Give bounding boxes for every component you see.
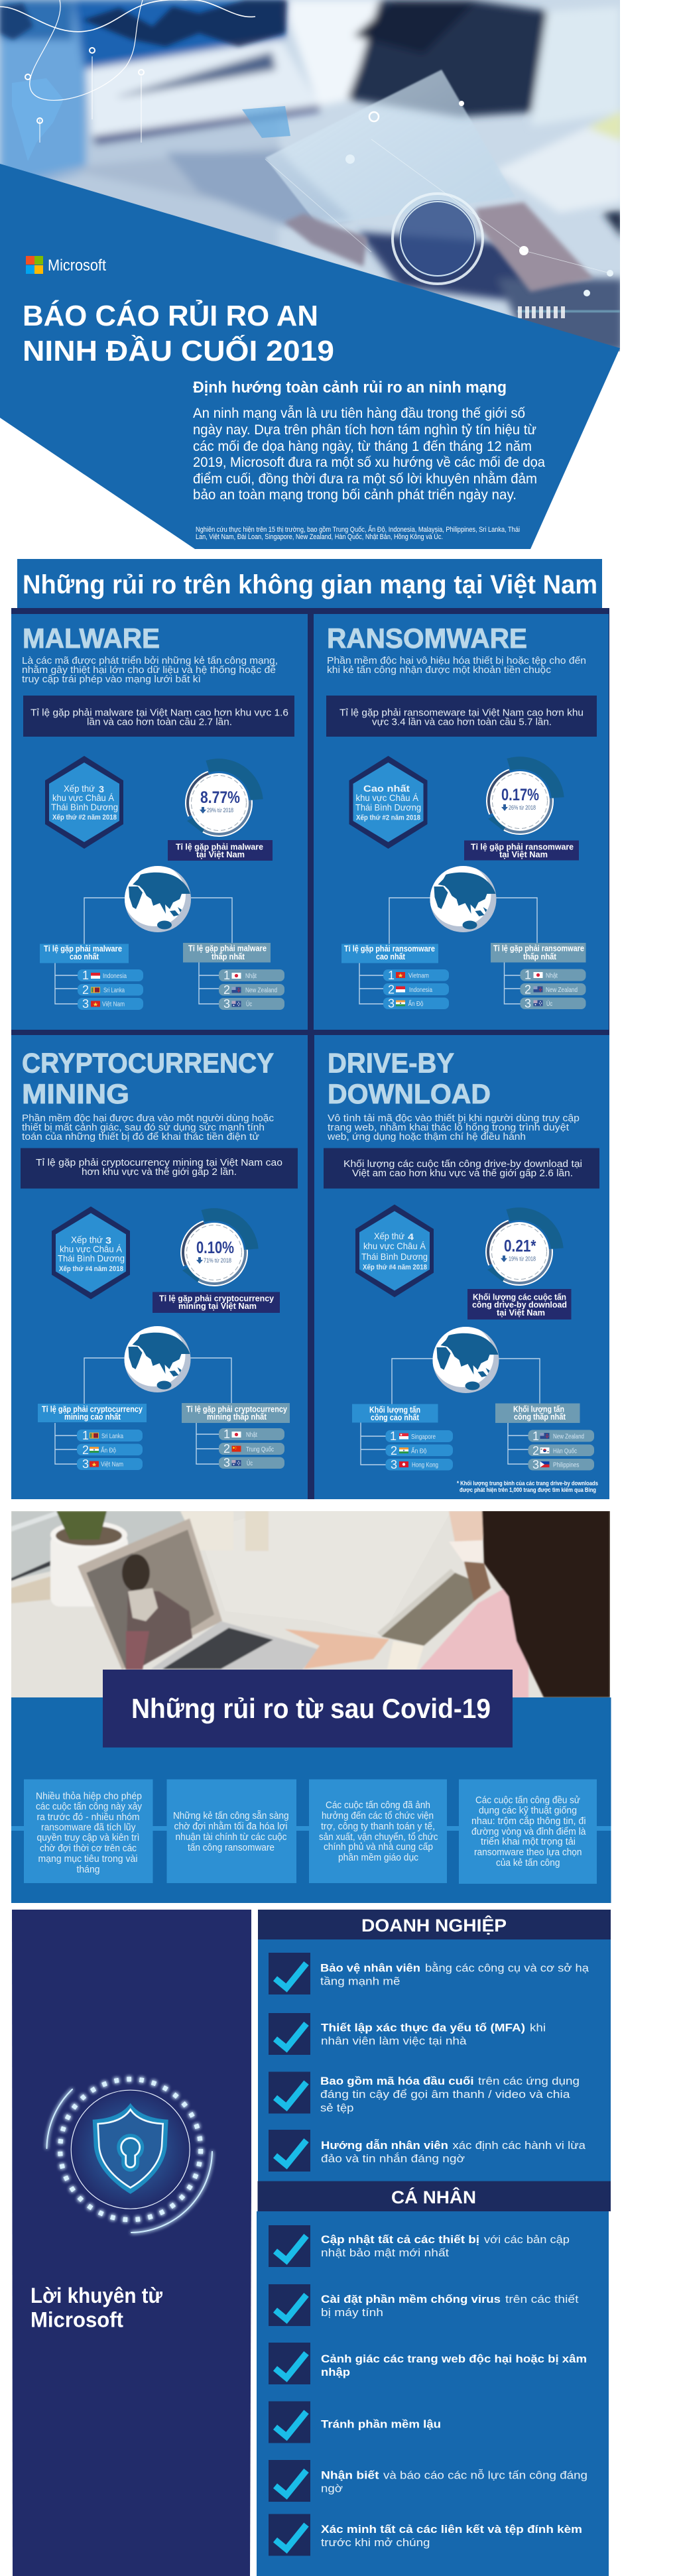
heading banner: cyber risks in Vietnam bbox=[17, 559, 602, 609]
ranking: lowest ransomware: Nhật bbox=[546, 972, 558, 980]
card 3 bbox=[309, 1780, 447, 1883]
card 1: Nhiều thỏa hiệp cho phép bbox=[36, 1790, 142, 1802]
hexagon: regional rank: Cao nhất bbox=[363, 783, 410, 794]
label: highest malware bbox=[40, 944, 129, 963]
ranking: highest cryptocurrency: 3 bbox=[82, 1457, 89, 1471]
card 4: Các cuộc tấn công đều sử bbox=[475, 1794, 580, 1806]
icon: Microsoft logo bbox=[26, 256, 106, 275]
label: highest attack volume: công cao nhất bbox=[371, 1413, 420, 1422]
donut: encounter rate: 8.77% bbox=[200, 788, 240, 807]
label: highest malware: Tỉ lệ gặp phải malware bbox=[44, 944, 122, 953]
research footnote: Nghiên cứu thực hiện trên 15 thị trường, bao gồm Trung Quốc, Ấn Độ, Indonesia, Malaysia, Philippines, Sri Lanka, Thái bbox=[196, 525, 520, 534]
ranking: highest ransomware bbox=[383, 969, 449, 1011]
card 4 bbox=[459, 1780, 597, 1884]
stat callout bbox=[23, 696, 294, 737]
heading: business: DOANH NGHIỆP bbox=[361, 1915, 507, 1935]
heading: individuals bbox=[257, 2181, 611, 2211]
stat callout: Tỉ lệ gặp phải cryptocurrency mining tại Việt Nam cao bbox=[36, 1157, 282, 1168]
ranking: highest malware bbox=[78, 969, 143, 1011]
stat callout: Khối lượng các cuộc tấn công drive-by download tại bbox=[343, 1158, 582, 1170]
malware description bbox=[22, 655, 278, 685]
item: guide employees bbox=[269, 2130, 586, 2172]
item: update devices bbox=[269, 2225, 570, 2267]
panel: advice from Microsoft bbox=[12, 1910, 251, 2576]
intro paragraph: ngày nay. Dựa trên phân tích hơn tám nghìn tỷ tín hiệu từ bbox=[193, 422, 536, 438]
hexagon: regional rank: khu vực Châu Á bbox=[52, 792, 115, 803]
card 1: tháng bbox=[77, 1864, 99, 1875]
ranking: highest malware: 2 bbox=[82, 983, 89, 997]
heading: individuals: CÁ NHÂN bbox=[391, 2187, 476, 2207]
ranking: lowest ransomware: 3 bbox=[525, 997, 531, 1011]
stat callout: Việt am cao hơn khu vực và thế giới gấp 2.6 lần. bbox=[352, 1168, 573, 1179]
ranking: highest malware: Việt Nam bbox=[102, 1000, 125, 1008]
ranking: highest attack volume: 1 bbox=[390, 1430, 397, 1443]
card 1 bbox=[24, 1780, 153, 1883]
intro paragraph: điểm cuối, đồng thời đưa ra một số lời khuyên nhằm đảm bbox=[193, 471, 537, 487]
caption: Tỉ lệ gặp phải malware bbox=[176, 842, 263, 851]
item: update devices: Cập nhật tất cả các thiết bị bbox=[321, 2234, 479, 2246]
item: malicious websites: Cảnh giác các trang web độc hại hoặc bị xâm bbox=[321, 2353, 587, 2365]
hero blue panel bbox=[0, 164, 620, 549]
ranking: lowest cryptocurrency: Trung Quốc bbox=[246, 1445, 274, 1453]
item: end-to-end encryption: Bao gồm mã hóa đầu cuối bbox=[320, 2075, 473, 2087]
cryptocurrency description: thiết bị mất cảnh giác, sau đó sử dụng sức mạnh tính bbox=[22, 1122, 265, 1133]
label: lowest cryptocurrency bbox=[182, 1403, 290, 1423]
ranking: lowest malware: Nhật bbox=[245, 972, 257, 980]
ranking: highest attack volume: 2 bbox=[391, 1444, 397, 1457]
stat callout: hơn khu vực và thế giới gấp 2 lần. bbox=[82, 1166, 237, 1178]
donut: encounter rate: 26% từ 2018 bbox=[509, 804, 536, 812]
ranking: highest ransomware: 2 bbox=[388, 983, 395, 996]
ranking: lowest cryptocurrency: Nhật bbox=[246, 1431, 257, 1439]
item: antivirus bbox=[269, 2284, 579, 2326]
label: lowest attack volume: Khối lượng tấn bbox=[513, 1404, 564, 1414]
footnote: được phát hiện trên 1,000 trang được tìm kiếm qua Bing bbox=[460, 1487, 596, 1494]
donut: attack volume bbox=[487, 1207, 564, 1283]
item: MFA: khi bbox=[530, 2022, 546, 2034]
connector lines bbox=[55, 1358, 231, 1464]
card 2: chờ đợi nhằm tối đa hóa lợi bbox=[174, 1821, 288, 1832]
label: highest attack volume: Khối lượng tấn bbox=[369, 1406, 420, 1415]
panel: personal checklist bbox=[257, 2181, 611, 2576]
card 4: của kẻ tấn công bbox=[496, 1857, 560, 1869]
hexagon: regional rank: khu vực Châu Á bbox=[363, 1241, 426, 1251]
item: guide employees: Hướng dẫn nhân viên bbox=[321, 2139, 448, 2152]
caption: mining tại Việt Nam bbox=[178, 1301, 257, 1311]
card 3: trợ, công ty thanh toán y tế, bbox=[321, 1821, 435, 1832]
heading box: Những rủi ro từ sau Covid-19 bbox=[131, 1693, 491, 1724]
item: MFA bbox=[269, 2013, 546, 2055]
panel: ransomware bbox=[314, 614, 609, 1030]
hexagon: regional rank: Thái Bình Dương bbox=[58, 1253, 125, 1264]
research footnote: Lan, Việt Nam, Đài Loan, Singapore, New Zealand, Hàn Quốc, Nhật Bản, Hồng Kông và Úc. bbox=[196, 532, 443, 541]
heading: advice: Lời khuyên từ bbox=[31, 2284, 163, 2307]
stat callout bbox=[326, 696, 597, 737]
donut: attack volume: 0.21* bbox=[504, 1237, 536, 1256]
card 3: chính phủ và nhà cung cấp bbox=[324, 1841, 433, 1853]
item: protect employees: tầng mạnh mẽ bbox=[320, 1976, 401, 1988]
ranking: lowest malware: New Zealand bbox=[245, 987, 277, 995]
label: lowest ransomware: Tỉ lệ gặp phải ransomware bbox=[493, 944, 584, 953]
item: verify links: Xác minh tất cả các liên kết và tệp đính kèm bbox=[321, 2524, 582, 2536]
heading: cryptocurrency mining: MINING bbox=[22, 1078, 129, 1109]
item: protect employees: Bảo vệ nhân viên bbox=[320, 1963, 420, 1975]
card 1: các cuộc tấn công này xảy bbox=[36, 1801, 142, 1812]
donut: encounter rate: 29% từ 2018 bbox=[207, 807, 233, 814]
ranking: lowest cryptocurrency: Úc bbox=[247, 1459, 253, 1467]
ranking: lowest malware bbox=[219, 969, 284, 1011]
stat callout: Tỉ lệ gặp phải malware tại Việt Nam cao hơn khu vực 1.6 bbox=[31, 707, 288, 719]
card 4: triển khai một trọng tải bbox=[481, 1836, 576, 1847]
hero photo: hands on holographic tablet with world map bbox=[0, 0, 623, 351]
heading: advice bbox=[31, 2284, 163, 2331]
item: malicious websites bbox=[269, 2343, 587, 2384]
ranking: lowest malware: Úc bbox=[246, 1000, 252, 1008]
ranking: highest cryptocurrency: Việt Nam bbox=[101, 1460, 123, 1468]
malware description: Là các mã được phát triển bởi những kẻ tấn công mạng, bbox=[22, 655, 278, 666]
hexagon: regional rank: 4 bbox=[408, 1231, 414, 1242]
item: antivirus: bị máy tính bbox=[321, 2307, 383, 2319]
caption: Tỉ lệ gặp phải cryptocurrency bbox=[159, 1293, 275, 1304]
hexagon: regional rank bbox=[349, 756, 427, 849]
covid photo: woman on video call with masked man on laptop bbox=[11, 1510, 610, 1699]
ranking: lowest cryptocurrency: 1 bbox=[223, 1428, 230, 1441]
ranking: highest attack volume: Hong Kong bbox=[412, 1461, 438, 1469]
connector lines bbox=[359, 898, 537, 1004]
item: recognize and report: ngờ bbox=[321, 2483, 343, 2494]
ransomware description bbox=[327, 655, 586, 676]
donut: attack volume: 19% từ 2018 bbox=[509, 1256, 536, 1262]
footnote bbox=[457, 1480, 598, 1494]
malware description: truy cập trái phép vào mạng lưới bất kì bbox=[22, 674, 201, 685]
heading: ransomware: RANSOMWARE bbox=[327, 623, 527, 654]
subtitle: Định hướng toàn cảnh rủi ro an ninh mạng bbox=[193, 379, 507, 397]
heading: business bbox=[258, 1910, 611, 1939]
card 3: sản xuất, vận chuyển, tổ chức bbox=[319, 1831, 438, 1843]
card 4: ransomware theo lựa chọn bbox=[474, 1847, 582, 1858]
donut: encounter rate: 0.17% bbox=[501, 786, 539, 804]
drive-by description: trang web, nhằm khai thác lỗ hổng trong trình duyệt bbox=[328, 1122, 570, 1133]
heading: drive-by download: DOWNLOAD bbox=[328, 1078, 491, 1109]
section: risks after Covid-19 bbox=[11, 1670, 611, 1903]
label: lowest attack volume bbox=[495, 1403, 580, 1423]
heading: drive-by download: DRIVE-BY bbox=[328, 1048, 454, 1078]
item: MFA: Thiết lập xác thực đa yếu tố (MFA) bbox=[321, 2022, 525, 2034]
ranking: lowest ransomware: New Zealand bbox=[546, 986, 578, 994]
ranking: highest attack volume: 3 bbox=[391, 1458, 397, 1471]
item: avoid pirated software bbox=[269, 2402, 441, 2443]
label: highest ransomware: cao nhất bbox=[376, 952, 406, 961]
caption: công drive-by download bbox=[472, 1300, 567, 1310]
hexagon: regional rank bbox=[52, 1207, 130, 1300]
ranking: highest attack volume: Ấn Độ bbox=[411, 1447, 427, 1455]
ranking: highest malware: Indonesia bbox=[103, 972, 127, 980]
globe bbox=[428, 864, 496, 932]
cryptocurrency description bbox=[22, 1113, 275, 1142]
ranking: highest attack volume bbox=[386, 1430, 453, 1471]
hexagon: regional rank: Xếp thứ bbox=[64, 783, 95, 794]
label: lowest attack volume: công thấp nhất bbox=[514, 1412, 566, 1422]
ranking: lowest attack volume: New Zealand bbox=[553, 1432, 584, 1440]
heading: advice: Microsoft bbox=[31, 2307, 123, 2331]
label: highest cryptocurrency bbox=[38, 1404, 147, 1422]
label: lowest cryptocurrency: mining thấp nhất bbox=[207, 1412, 267, 1422]
panel: malware bbox=[11, 614, 308, 1030]
item: recognize and report: Nhận biết bbox=[321, 2469, 379, 2481]
item: end-to-end encryption: sẻ tệp bbox=[320, 2102, 354, 2114]
hexagon: regional rank: 3 bbox=[99, 784, 104, 794]
ranking: lowest ransomware: 2 bbox=[525, 983, 531, 996]
item: antivirus: Cài đặt phần mềm chống virus bbox=[321, 2294, 501, 2305]
heading: drive-by download bbox=[328, 1048, 491, 1109]
ranking: lowest attack volume: 1 bbox=[532, 1430, 539, 1443]
card 1: ra trước đó - nhiều nhóm bbox=[37, 1811, 139, 1823]
caption: tại Việt Nam bbox=[499, 849, 548, 859]
ranking: lowest malware: 2 bbox=[223, 983, 230, 997]
caption: Tỉ lệ gặp phải ransomware bbox=[471, 842, 574, 851]
donut: encounter rate: 0.10% bbox=[196, 1239, 234, 1257]
item: verify links: trước khi mở chúng bbox=[321, 2537, 430, 2549]
ranking: highest cryptocurrency: 2 bbox=[82, 1443, 89, 1457]
card 4: dụng các kỹ thuật giống bbox=[479, 1805, 577, 1816]
ranking: highest cryptocurrency bbox=[77, 1429, 143, 1471]
item: end-to-end encryption: đáng tin cậy để gọi âm thanh / video và chia bbox=[320, 2089, 570, 2101]
item: end-to-end encryption: trên các ứng dụng bbox=[478, 2075, 580, 2087]
card 1: quyền truy cập và kiên trì bbox=[37, 1832, 139, 1843]
label: lowest ransomware: thấp nhất bbox=[523, 952, 557, 961]
panel: business checklist bbox=[258, 1910, 611, 2181]
caption: Khối lượng các cuộc tấn bbox=[473, 1292, 566, 1302]
connector lines bbox=[55, 898, 232, 1004]
hexagon: regional rank bbox=[355, 1204, 434, 1297]
card 1: mạng mục tiêu trong vài bbox=[38, 1853, 138, 1865]
globe bbox=[123, 1324, 191, 1392]
ransomware description: khi kẻ tấn công nhận được một khoản tiền chuộc bbox=[327, 664, 552, 676]
label: lowest cryptocurrency: Tỉ lệ gặp phải cryptocurrency bbox=[186, 1404, 287, 1414]
malware description: nhằm gây thiệt hại lớn cho dữ liệu và hệ thống hoặc để bbox=[22, 664, 276, 676]
label: lowest malware: thấp nhất bbox=[212, 952, 245, 961]
globe bbox=[431, 1325, 499, 1393]
caption bbox=[464, 841, 579, 861]
item: antivirus: trên các thiết bbox=[505, 2294, 579, 2305]
drive-by description: web, ứng dụng hoặc thậm chí hệ điều hành bbox=[327, 1131, 526, 1142]
icon: Microsoft logo: Microsoft bbox=[48, 257, 106, 275]
heading: cryptocurrency mining bbox=[22, 1048, 274, 1109]
stat callout: lần và cao hơn toàn cầu 2.7 lần. bbox=[87, 716, 232, 728]
intro paragraph: 2019, Microsoft đưa ra một số xu hướng về các mối đe dọa bbox=[193, 455, 545, 470]
card 3: phần mềm giáo dục bbox=[338, 1852, 418, 1863]
ranking: lowest attack volume: 3 bbox=[532, 1458, 539, 1471]
hexagon: regional rank: Xếp thứ #2 năm 2018 bbox=[356, 814, 420, 822]
ranking: highest malware: 3 bbox=[82, 997, 89, 1011]
intro paragraph: bảo an toàn mạng trong bối cảnh phát triển ngày nay. bbox=[193, 487, 517, 503]
icon: glowing shield with keyhole bbox=[46, 2079, 212, 2233]
heading: cryptocurrency mining: CRYPTOCURRENCY bbox=[22, 1048, 274, 1078]
item: guide employees: đảo và tin nhắn đáng ngờ bbox=[321, 2152, 465, 2165]
item: avoid pirated software: Tránh phần mềm lậu bbox=[321, 2419, 441, 2431]
donut: encounter rate: 71% từ 2018 bbox=[204, 1257, 231, 1264]
heading box bbox=[103, 1670, 513, 1748]
hexagon: regional rank: Xếp thứ #4 năm 2018 bbox=[363, 1264, 427, 1272]
heading: malware: MALWARE bbox=[23, 623, 160, 654]
ranking: lowest cryptocurrency: 3 bbox=[223, 1456, 230, 1469]
stat callout bbox=[21, 1148, 298, 1188]
ranking: highest malware: Sri Lanka bbox=[103, 987, 125, 995]
caption: tại Việt Nam bbox=[196, 849, 245, 859]
hexagon: regional rank: Thái Bình Dương bbox=[51, 802, 118, 812]
title: NINH ĐẦU CUỐI 2019 bbox=[23, 334, 334, 367]
ranking: highest attack volume: Singapore bbox=[411, 1433, 436, 1441]
item: end-to-end encryption bbox=[269, 2071, 580, 2114]
label: highest cryptocurrency: Tỉ lệ gặp phải cryptocurrency bbox=[42, 1404, 143, 1414]
card 4: đường vòng và đỉnh điểm là bbox=[471, 1826, 586, 1837]
ranking: highest ransomware: 3 bbox=[388, 997, 395, 1011]
hexagon: regional rank bbox=[45, 756, 123, 849]
card 3: hưởng đến các tổ chức viện bbox=[322, 1810, 434, 1821]
card 1: chờ đợi thời cơ trên các bbox=[40, 1843, 137, 1854]
heading banner: cyber risks in Vietnam: Những rủi ro trên không gian mạng tại Việt Nam bbox=[23, 570, 597, 599]
ranking: lowest cryptocurrency: 2 bbox=[223, 1442, 230, 1455]
ranking: highest cryptocurrency: Ấn Độ bbox=[101, 1445, 116, 1455]
intro paragraph: các mối đe dọa hàng ngày, từ tháng 1 đến tháng 12 năm bbox=[193, 439, 532, 454]
ranking: lowest malware: 3 bbox=[223, 997, 230, 1011]
card 1: ransomware đã tích lũy bbox=[41, 1822, 136, 1833]
card 2 bbox=[167, 1780, 296, 1883]
item: recognize and report bbox=[269, 2460, 587, 2502]
item: update devices: nhật bảo mật mới nhất bbox=[321, 2247, 449, 2259]
caption bbox=[153, 1292, 280, 1313]
item: update devices: với các bản cập bbox=[484, 2234, 570, 2246]
ranking: highest ransomware: 1 bbox=[388, 969, 395, 982]
item: protect employees: bằng các công cụ và cơ sở hạ bbox=[425, 1961, 589, 1975]
title: BÁO CÁO RỦI RO AN bbox=[23, 298, 318, 332]
item: MFA: nhân viên làm việc tại nhà bbox=[321, 2036, 467, 2048]
item: protect employees bbox=[269, 1953, 589, 1994]
hexagon: regional rank: Xếp thứ bbox=[374, 1231, 404, 1241]
stat callout: vực 3.4 lần và cao hơn toàn cầu 5.7 lần. bbox=[372, 716, 552, 728]
card 2: tấn công ransomware bbox=[188, 1842, 275, 1853]
donut: encounter rate bbox=[488, 757, 564, 832]
item: verify links bbox=[269, 2514, 582, 2555]
ranking: lowest attack volume: 2 bbox=[532, 1444, 539, 1457]
label: lowest malware bbox=[183, 943, 271, 963]
item: recognize and report: và báo cáo các nỗ lực tấn công đáng bbox=[383, 2469, 587, 2481]
ranking: highest ransomware: Ấn Độ bbox=[408, 999, 424, 1008]
label: lowest ransomware bbox=[491, 943, 586, 963]
hexagon: regional rank: Xếp thứ #2 năm 2018 bbox=[52, 814, 117, 822]
ranking: highest cryptocurrency: 1 bbox=[82, 1429, 89, 1442]
intro paragraph: An ninh mạng vẫn là ưu tiên hàng đầu trong thế giới số bbox=[193, 406, 525, 421]
caption: tại Việt Nam bbox=[497, 1308, 545, 1318]
stat callout: Tỉ lệ gặp phải ransomeware tại Việt Nam cao hơn khu bbox=[340, 707, 584, 719]
card 4: nhau: trộm cắp thông tin, đi bbox=[471, 1815, 586, 1827]
hexagon: regional rank: khu vực Châu Á bbox=[60, 1244, 123, 1255]
globe bbox=[123, 864, 191, 932]
connector lines bbox=[361, 1359, 540, 1465]
drive-by description bbox=[327, 1113, 580, 1142]
hexagon: regional rank: Xếp thứ bbox=[71, 1235, 103, 1245]
caption bbox=[467, 1289, 572, 1319]
donut: encounter rate bbox=[182, 1208, 259, 1284]
label: highest malware: cao nhất bbox=[70, 952, 99, 961]
ranking: highest malware: 1 bbox=[82, 969, 89, 982]
drive-by description: Vô tình tải mã độc vào thiết bị khi người dùng truy cập bbox=[328, 1113, 580, 1124]
ranking: lowest attack volume: Hàn Quốc bbox=[553, 1447, 577, 1455]
item: guide employees: xác định các hành vi lừa bbox=[452, 2140, 586, 2152]
hexagon: regional rank: Thái Bình Dương bbox=[355, 802, 421, 813]
panel: drive-by download bbox=[314, 1035, 609, 1499]
ranking: highest cryptocurrency: Sri Lanka bbox=[101, 1432, 123, 1440]
title bbox=[23, 298, 334, 367]
label: highest cryptocurrency: mining cao nhất bbox=[64, 1412, 121, 1422]
footnote: * Khối lượng trung bình của các trang drive-by downloads bbox=[457, 1480, 598, 1487]
ranking: lowest ransomware: Úc bbox=[546, 999, 552, 1008]
panel: cryptocurrency mining bbox=[11, 1035, 308, 1499]
caption bbox=[168, 840, 273, 861]
label: highest attack volume bbox=[352, 1404, 438, 1423]
ranking: lowest malware: 1 bbox=[223, 969, 230, 982]
hexagon: regional rank: Thái Bình Dương bbox=[361, 1251, 428, 1262]
item: malicious websites: nhập bbox=[321, 2366, 350, 2378]
ranking: lowest ransomware bbox=[520, 968, 586, 1011]
ranking: lowest attack volume bbox=[528, 1430, 594, 1471]
card 2: nhuận tài chính từ các cuộc bbox=[175, 1831, 287, 1843]
card 2: Những kẻ tấn công sẵn sàng bbox=[173, 1810, 289, 1821]
stat callout bbox=[324, 1148, 599, 1188]
hexagon: regional rank: khu vực Châu Á bbox=[355, 792, 419, 803]
ranking: lowest attack volume: Philippines bbox=[553, 1461, 580, 1469]
ranking: highest ransomware: Indonesia bbox=[409, 986, 432, 994]
intro paragraph bbox=[193, 406, 545, 503]
hexagon: regional rank: 3 bbox=[105, 1235, 111, 1245]
research footnote bbox=[196, 525, 520, 541]
label: highest ransomware: Tỉ lệ gặp phải ransomware bbox=[344, 944, 435, 953]
navy grid background bbox=[11, 608, 609, 1035]
ranking: lowest cryptocurrency bbox=[219, 1428, 284, 1469]
hexagon: regional rank: Xếp thứ #4 năm 2018 bbox=[59, 1265, 123, 1273]
ranking: highest ransomware: Vietnam bbox=[408, 972, 429, 980]
ranking: lowest ransomware: 1 bbox=[525, 968, 531, 981]
ransomware description: Phần mềm độc hại vô hiệu hóa thiết bị hoặc tệp cho đến bbox=[327, 655, 586, 666]
label: lowest malware: Tỉ lệ gặp phải malware bbox=[188, 944, 267, 953]
donut: encounter rate bbox=[187, 759, 263, 834]
label: highest ransomware bbox=[341, 944, 438, 963]
cryptocurrency description: Phần mềm độc hại được đưa vào một người dùng hoặc bbox=[22, 1113, 275, 1124]
cryptocurrency description: toán của những thiết bị đó để khai thác tiền điện tử bbox=[22, 1131, 259, 1142]
card 3: Các cuộc tấn công đã ảnh bbox=[326, 1800, 430, 1811]
